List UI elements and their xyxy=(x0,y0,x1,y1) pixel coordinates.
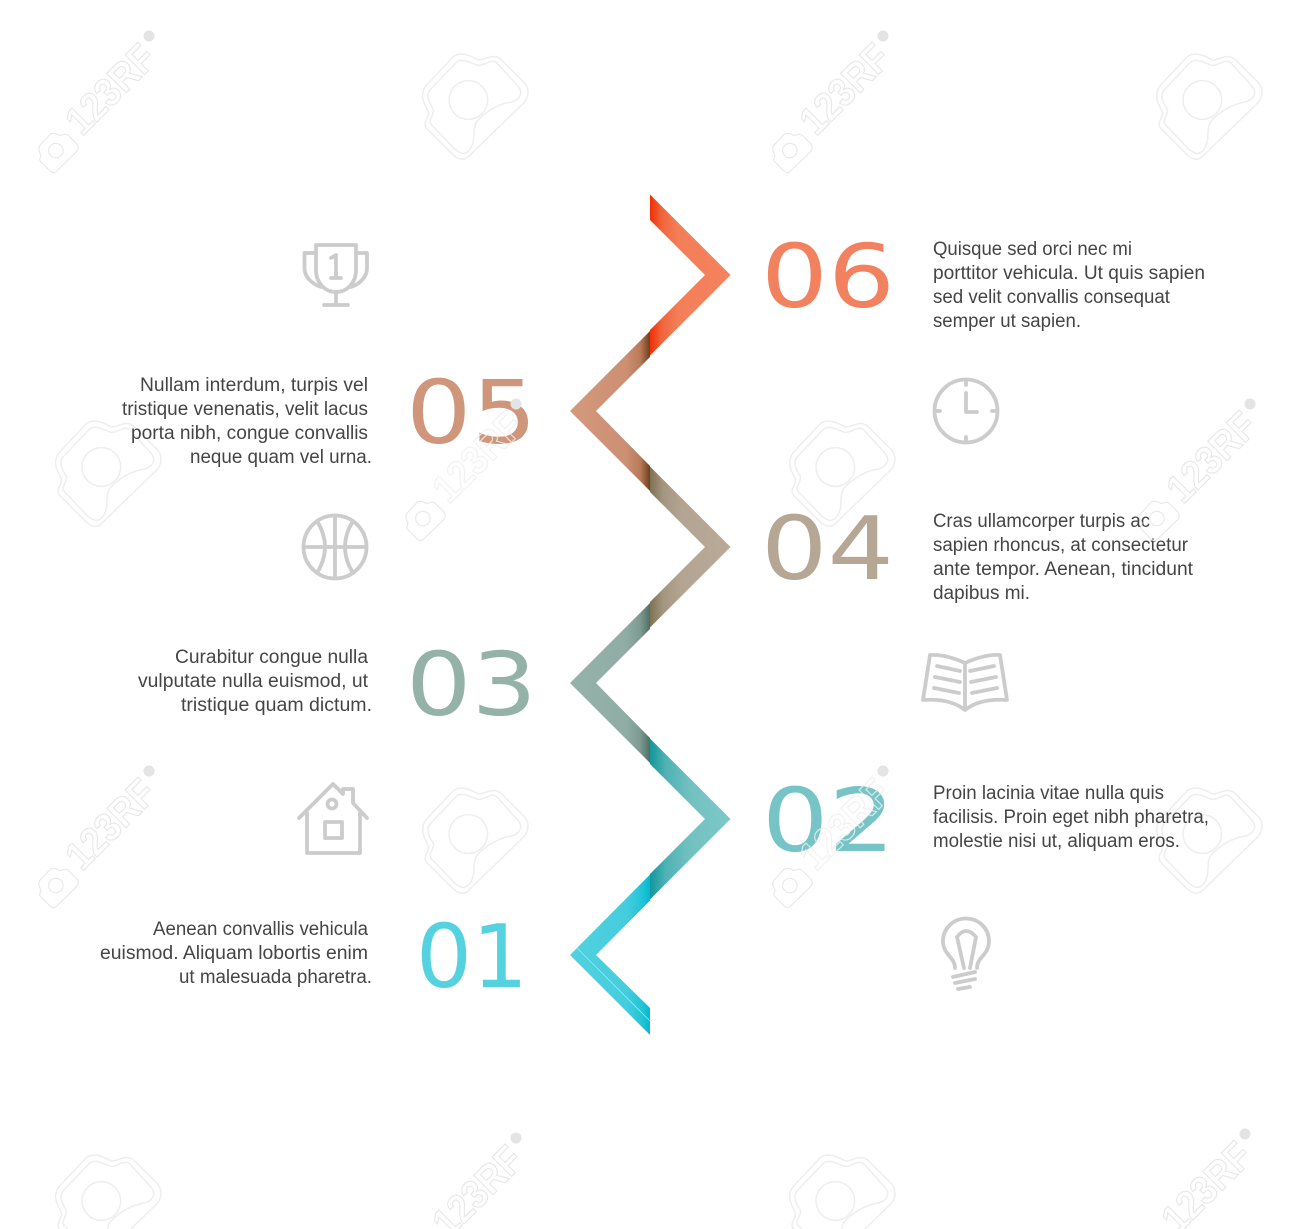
text block 06: Quisque sed orci nec mi xyxy=(933,239,1132,260)
ribbon segment 06 xyxy=(650,194,730,356)
icon: clock xyxy=(934,380,998,442)
text block 01 xyxy=(100,919,372,988)
text block 01: Aenean convallis vehicula xyxy=(153,919,368,940)
watermark: 123RF logos: 123RF xyxy=(1158,404,1266,511)
icon: open book xyxy=(923,655,1007,710)
text block 02: Proin lacinia vitae nulla quis xyxy=(933,783,1164,804)
text block 05: neque quam vel urna. xyxy=(190,447,372,468)
text block 04: sapien rhoncus, at consectetur xyxy=(933,535,1189,556)
text block 05: tristique venenatis, velit lacus xyxy=(122,399,368,420)
text block 02: molestie nisi ut, aliquam eros. xyxy=(933,831,1180,852)
text block 03 xyxy=(138,647,372,716)
text block 02 xyxy=(933,783,1209,852)
text block 05: porta nibh, congue convallis xyxy=(131,423,368,444)
text block 06: porttitor vehicula. Ut quis sapien xyxy=(933,263,1205,284)
icon: basketball xyxy=(304,516,366,578)
icon: trophy xyxy=(304,245,367,305)
number 02: 02 xyxy=(762,770,895,872)
number 06: 06 xyxy=(761,226,895,328)
text block 05 xyxy=(122,375,372,468)
icon: house xyxy=(299,784,367,853)
text block 04 xyxy=(933,511,1194,604)
watermark: 123RF logos: 123RF xyxy=(57,771,165,878)
watermark: 123RF logos: 123RF xyxy=(791,771,899,878)
watermark: 123RF logos: 123RF xyxy=(424,404,532,511)
text block 04: dapibus mi. xyxy=(933,583,1030,604)
zigzag timeline ribbon xyxy=(570,194,730,1035)
ribbon segment 05 xyxy=(570,331,650,491)
icon: light bulb xyxy=(943,919,989,989)
ribbon segment 03 xyxy=(570,603,650,763)
text block 01: ut malesuada pharetra. xyxy=(179,967,372,988)
text block 06: semper ut sapien. xyxy=(933,311,1081,332)
text block 05: Nullam interdum, turpis vel xyxy=(140,375,368,396)
text block 04: ante tempor. Aenean, tincidunt xyxy=(933,559,1194,580)
ribbon segment 01 xyxy=(570,874,650,1035)
text block 03: tristique quam dictum. xyxy=(181,695,372,716)
number 04: 04 xyxy=(761,498,894,600)
text block 04: Cras ullamcorper turpis ac xyxy=(933,511,1150,532)
text block 03: Curabitur congue nulla xyxy=(175,647,368,668)
ribbon segment 04 xyxy=(650,466,730,628)
text block 06 xyxy=(933,239,1205,332)
ribbon highlight xyxy=(577,948,650,1021)
watermark: 123RF logos: 123RF xyxy=(791,36,899,143)
number 01: 01 xyxy=(416,906,528,1008)
text block 02: facilisis. Proin eget nibh pharetra, xyxy=(933,807,1209,828)
number 05: 05 xyxy=(406,362,537,464)
number 03: 03 xyxy=(406,634,537,736)
watermark: 123RF logos: 123RF xyxy=(57,36,165,143)
ribbon segment 02 xyxy=(650,738,730,900)
text block 03: vulputate nulla euismod, ut xyxy=(138,671,369,692)
text block 06: sed velit convallis consequat xyxy=(933,287,1171,308)
text block 01: euismod. Aliquam lobortis enim xyxy=(100,943,368,964)
